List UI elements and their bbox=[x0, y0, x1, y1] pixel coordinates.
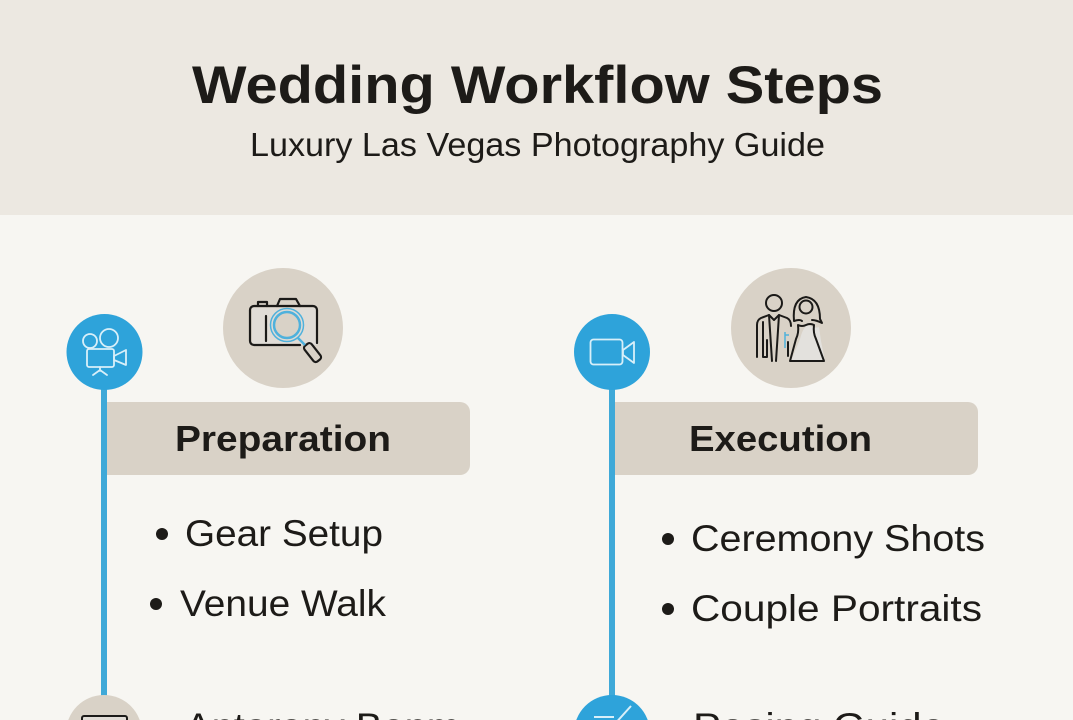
list: execution items bbox=[662, 518, 985, 629]
timeline line: left bbox=[101, 385, 107, 697]
panel: execution bbox=[574, 268, 985, 629]
heading bar: Execution bbox=[615, 402, 978, 475]
heading bar: Execution: Execution bbox=[689, 418, 872, 459]
title: Wedding Workflow Steps bbox=[192, 56, 883, 115]
icon: room bbox=[66, 695, 142, 720]
icon: video camera bbox=[574, 314, 650, 390]
panel: bottom left step bbox=[66, 695, 460, 720]
list: execution items: Ceremony Shots bbox=[691, 518, 985, 559]
list: preparation items: Venue Walk bbox=[180, 583, 387, 624]
header band bbox=[0, 0, 1073, 215]
panel: preparation bbox=[66, 268, 470, 624]
icon: video camera on tripod bbox=[66, 314, 142, 390]
timeline line: right bbox=[609, 385, 615, 697]
icon: camera with magnifier bbox=[223, 268, 343, 388]
icon: checklist bbox=[574, 695, 650, 720]
heading bar: Preparation: Preparation bbox=[175, 418, 391, 459]
list: preparation items bbox=[150, 513, 387, 624]
subtitle: Luxury Las Vegas Photography Guide bbox=[250, 126, 825, 163]
panel: bottom right step bbox=[574, 695, 945, 720]
icon: bride and groom bbox=[731, 268, 851, 388]
heading bar: Preparation bbox=[107, 402, 470, 475]
list: preparation items: Gear Setup bbox=[185, 513, 383, 554]
list: execution items: Couple Portraits bbox=[691, 588, 982, 629]
